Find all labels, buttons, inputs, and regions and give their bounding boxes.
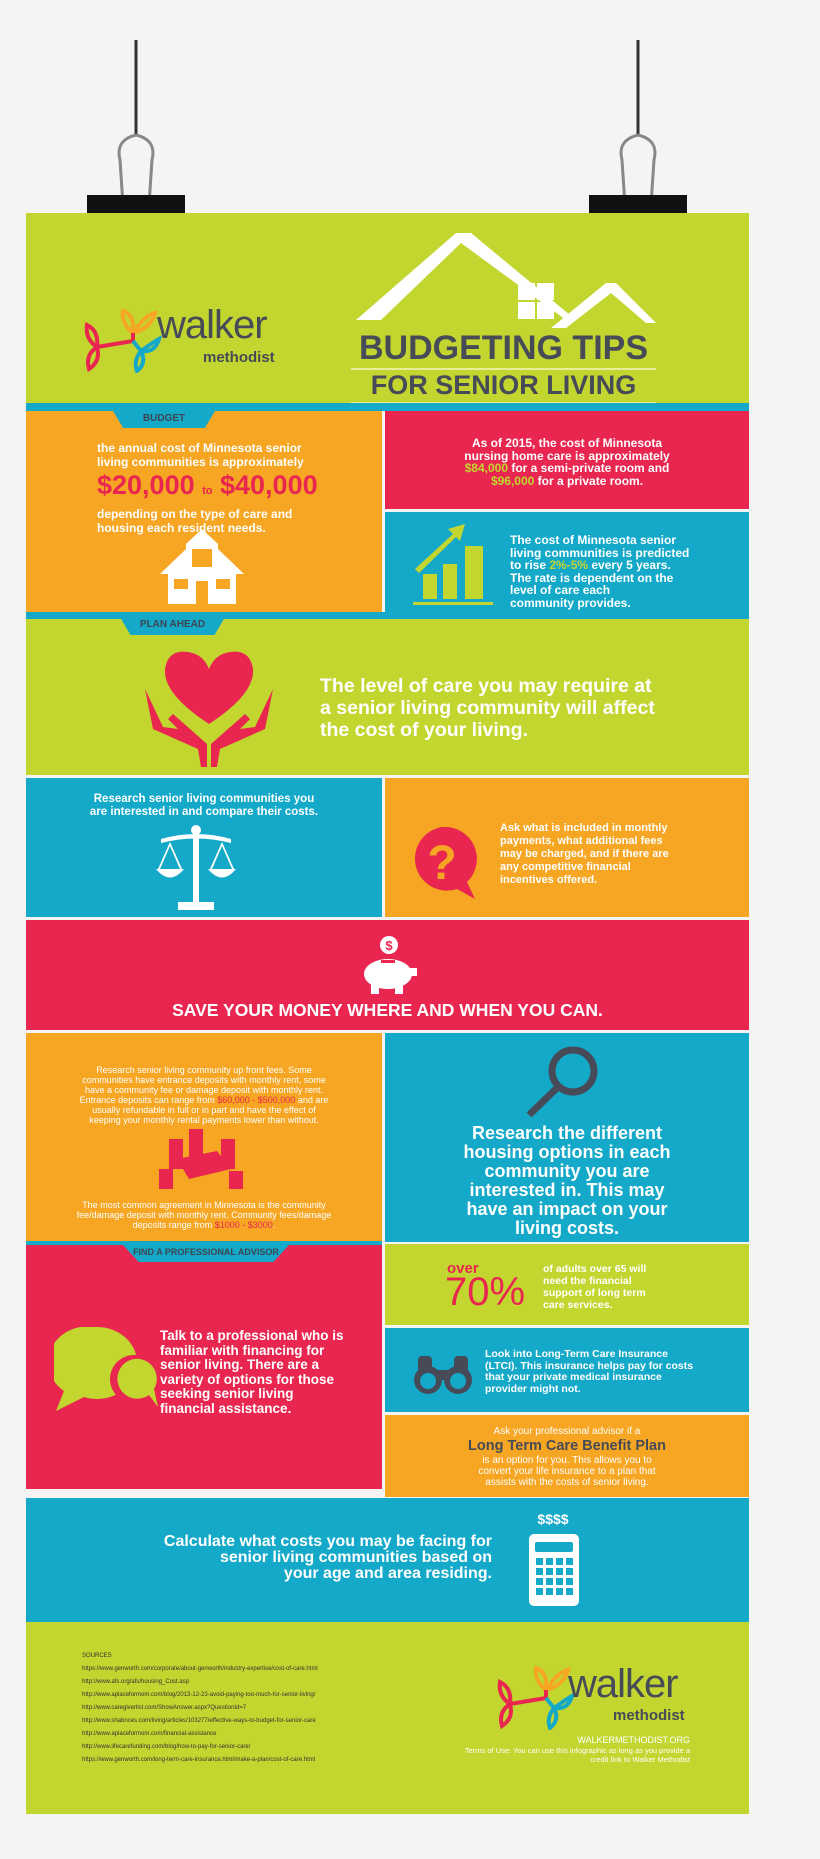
icon: house roofs	[356, 233, 656, 328]
panel: 70% stat	[385, 1244, 749, 1325]
logo: methodist	[203, 349, 275, 366]
logo: walker	[157, 303, 267, 347]
panel: benefit plan: assists with the costs of senior living.	[485, 1477, 649, 1488]
panel: nursing home cost: nursing home care is approximately	[464, 448, 670, 462]
panel: up front fees: have a community fee or damage deposit with monthly rent.	[85, 1085, 323, 1095]
panel: find advisor	[26, 1245, 382, 1489]
icon: calculator: $$$$	[537, 1511, 569, 1527]
panel: LTCI	[385, 1328, 749, 1412]
text: research housing: have an impact on your	[466, 1199, 668, 1219]
text: predicted rise: The rate is dependent on the	[510, 570, 673, 584]
panel: ask what is included	[385, 778, 749, 917]
panel: LTCI: (LTCI). This insurance helps pay for costs	[485, 1360, 693, 1372]
panel: up front fees: keeping your monthly rental payments lower than without.	[89, 1115, 319, 1125]
header	[26, 213, 749, 403]
icon: house	[160, 529, 244, 604]
panel: research & compare	[26, 778, 382, 917]
panel: calculate: your age and area residing.	[284, 1565, 492, 1582]
text: level of care: the cost of your living.	[320, 719, 528, 741]
text: ask: may be charged, and if there are	[500, 848, 669, 860]
icon: piggy bank: $	[385, 938, 393, 953]
clip: left	[87, 40, 185, 213]
text: predicted rise: level of care each	[510, 583, 610, 597]
text: talk to professional: senior living. There are a	[160, 1357, 319, 1372]
text: predicted rise: community provides.	[510, 596, 631, 610]
text: predicted rise: to rise 2%-5% every 5 years.	[510, 558, 671, 572]
sources: http://www.caregiverlist.com/ShowAnswer.aspx?QuestionId=7	[82, 1705, 246, 1711]
text: annual cost: the annual cost of Minnesota senior	[97, 441, 302, 455]
sources: http://www.aplaceformom.com/blog/2013-12-23-avoid-paying-too-much-for-senior-living/	[82, 1692, 315, 1698]
panel: research & compare: Research senior living communities you	[94, 793, 314, 805]
panel: up front fees	[26, 1033, 382, 1242]
footer logo	[498, 1662, 685, 1730]
text: talk to professional: variety of options for those	[160, 1372, 334, 1386]
icon: question bubble: ?	[427, 837, 457, 890]
panel: benefit plan: Long Term Care Benefit Plan	[468, 1438, 666, 1454]
icon: money stack	[159, 1129, 243, 1189]
title	[351, 329, 656, 403]
icon: speech bubbles	[54, 1327, 158, 1411]
text: save your money: SAVE YOUR MONEY WHERE AND WHEN YOU CAN.	[172, 1000, 603, 1020]
sources: https://www.genworth.com/corporate/about-genworth/industry-expertise/cost-of-care.html	[82, 1666, 318, 1672]
title: BUDGETING TIPS	[359, 329, 648, 367]
divider band	[26, 612, 749, 619]
panel: 70% stat: over	[447, 1260, 479, 1277]
text: research housing	[464, 1123, 670, 1238]
text: ask: any competitive financial	[500, 861, 631, 873]
text: predicted rise: living communities is predicted	[510, 546, 689, 560]
tab: plan ahead	[121, 619, 224, 635]
panel: LTCI: Look into Long-Term Care Insurance	[485, 1348, 668, 1360]
sources: https://www.genworth.com/long-term-care-insurance.html/make-a-plan/cost-of-care.html	[82, 1757, 315, 1763]
panel: benefit plan: convert your life insurance to a plan that	[478, 1466, 656, 1477]
panel: nursing home cost	[385, 411, 749, 509]
clip: right	[589, 40, 687, 213]
panel: save money	[26, 920, 749, 1030]
text: ask: payments, what additional fees	[500, 835, 663, 847]
text: talk to professional	[160, 1328, 344, 1416]
panel: calculate: Calculate what costs you may be facing for	[164, 1533, 492, 1550]
text: annual cost: housing each resident needs.	[97, 521, 266, 535]
title: FOR SENIOR LIVING	[371, 370, 636, 400]
text: annual cost: living communities is approximately depending on the type of care and	[97, 455, 304, 521]
panel: benefit plan	[385, 1415, 749, 1497]
footer url and terms: Terms of Use: You can use this infographic as long as you provide a credit link to Walker Methodist	[465, 1746, 690, 1764]
tab: budget: BUDGET	[143, 413, 185, 424]
icon: magnifier	[526, 1046, 598, 1117]
sources	[82, 1652, 318, 1763]
panel: up front fees: Entrance deposits can range from $60,000 - $500,000 and are	[80, 1095, 328, 1105]
panel: research & compare: are interested in and compare their costs.	[90, 806, 318, 818]
logo	[84, 303, 275, 373]
text: ask: incentives offered.	[500, 874, 597, 886]
panel: benefit plan: is an option for you. This allows you to	[482, 1455, 652, 1466]
tab: advisor	[122, 1244, 290, 1262]
icon: rising bar chart	[413, 524, 493, 605]
text: talk to professional: seeking senior living	[160, 1386, 294, 1401]
panel: LTCI: that your private medical insurance	[485, 1371, 662, 1383]
text: research housing: living costs.	[515, 1218, 619, 1238]
divider band	[26, 1241, 382, 1245]
sources: http://www.aplaceformom.com/financial-assistance	[82, 1731, 216, 1737]
icon: binoculars	[414, 1356, 472, 1394]
sources: SOURCES	[82, 1653, 112, 1659]
panel: up front fees: communities have entrance deposits with monthly rent, some	[82, 1075, 326, 1085]
text: research housing: community you are	[484, 1161, 650, 1181]
sources: http://www.shabnces.com/living/articles/103277/effective-ways-to-budget-for-senior-care	[82, 1718, 316, 1724]
text: level of care	[320, 675, 655, 741]
panel: LTCI: provider might not.	[485, 1382, 581, 1394]
text: ask	[500, 822, 669, 886]
panel: plan ahead	[26, 619, 749, 775]
panel: benefit plan: Ask your professional advisor if a	[494, 1426, 640, 1437]
panel: nursing home cost: As of 2015, the cost of Minnesota	[472, 436, 662, 450]
tab: budget	[113, 411, 215, 428]
panel: up front fees: deposits range from $1000 - $3000.	[133, 1220, 275, 1230]
text: annual cost: $20,000 to $40,000	[97, 470, 318, 500]
text: research housing: Research the different	[472, 1123, 662, 1143]
divider band	[26, 403, 749, 411]
text: predicted rise: The cost of Minnesota senior	[510, 533, 676, 547]
panel: 70% stat: need the financial	[543, 1275, 632, 1287]
text: level of care: The level of care you may require at	[320, 675, 652, 697]
tab: advisor: FIND A PROFESSIONAL ADVISOR	[133, 1247, 279, 1257]
panel: up front fees: Research senior living community up front fees. Some	[96, 1065, 312, 1075]
text: talk to professional: familiar with financing for	[160, 1342, 324, 1358]
icon: heart in hands	[145, 652, 273, 767]
text: talk to professional: Talk to a professional who is	[160, 1328, 344, 1343]
panel: 70% stat: of adults over 65 will	[543, 1263, 646, 1275]
footer logo: walker	[568, 1662, 678, 1706]
footer url and terms	[465, 1735, 690, 1764]
panel: research housing options	[385, 1033, 749, 1242]
text: research housing: housing options in each	[464, 1142, 670, 1162]
panel: calculate	[26, 1498, 749, 1622]
text: research housing: interested in. This may	[469, 1180, 665, 1200]
icon: scales	[156, 825, 236, 910]
icon: piggy bank	[364, 936, 417, 994]
text: predicted rise	[510, 533, 689, 610]
footer logo: methodist	[613, 1707, 685, 1724]
footer url and terms: WALKERMETHODIST.ORG	[577, 1735, 690, 1745]
footer	[26, 1622, 749, 1814]
tab: plan ahead: PLAN AHEAD	[140, 619, 205, 630]
panel: up front fees: fee/damage deposit with monthly rent. Community fees/damage	[77, 1210, 331, 1220]
text: talk to professional: financial assistance.	[160, 1400, 291, 1416]
panel: 70% stat: care services.	[543, 1299, 612, 1311]
panel: up front fees: usually refundable in full or in part and have the effect of	[92, 1105, 316, 1115]
panel: up front fees: The most common agreement in Minnesota is the community	[82, 1200, 326, 1210]
icon: calculator	[529, 1511, 579, 1606]
icon: question bubble	[415, 827, 477, 899]
panel: 70% stat: 70%	[445, 1270, 525, 1314]
text: level of care: a senior living community will affect	[320, 697, 655, 719]
text: annual cost	[97, 441, 318, 535]
panel: 70% stat: support of long term	[543, 1287, 646, 1299]
sources: http://www.afs.org/afs/housing_Cost.asp	[82, 1679, 189, 1685]
panel: budget cost	[26, 411, 382, 612]
panel: nursing home cost: $96,000 for a private room.	[491, 474, 643, 488]
text: ask: Ask what is included in monthly	[500, 822, 667, 834]
panel: cost rise	[385, 512, 749, 612]
panel: calculate: senior living communities based on	[220, 1549, 492, 1566]
sources: http://www.lifecarefunding.com/blog/how-to-pay-for-senior-care/	[82, 1744, 250, 1750]
panel: nursing home cost: $84,000 for a semi-private room and	[465, 461, 669, 475]
